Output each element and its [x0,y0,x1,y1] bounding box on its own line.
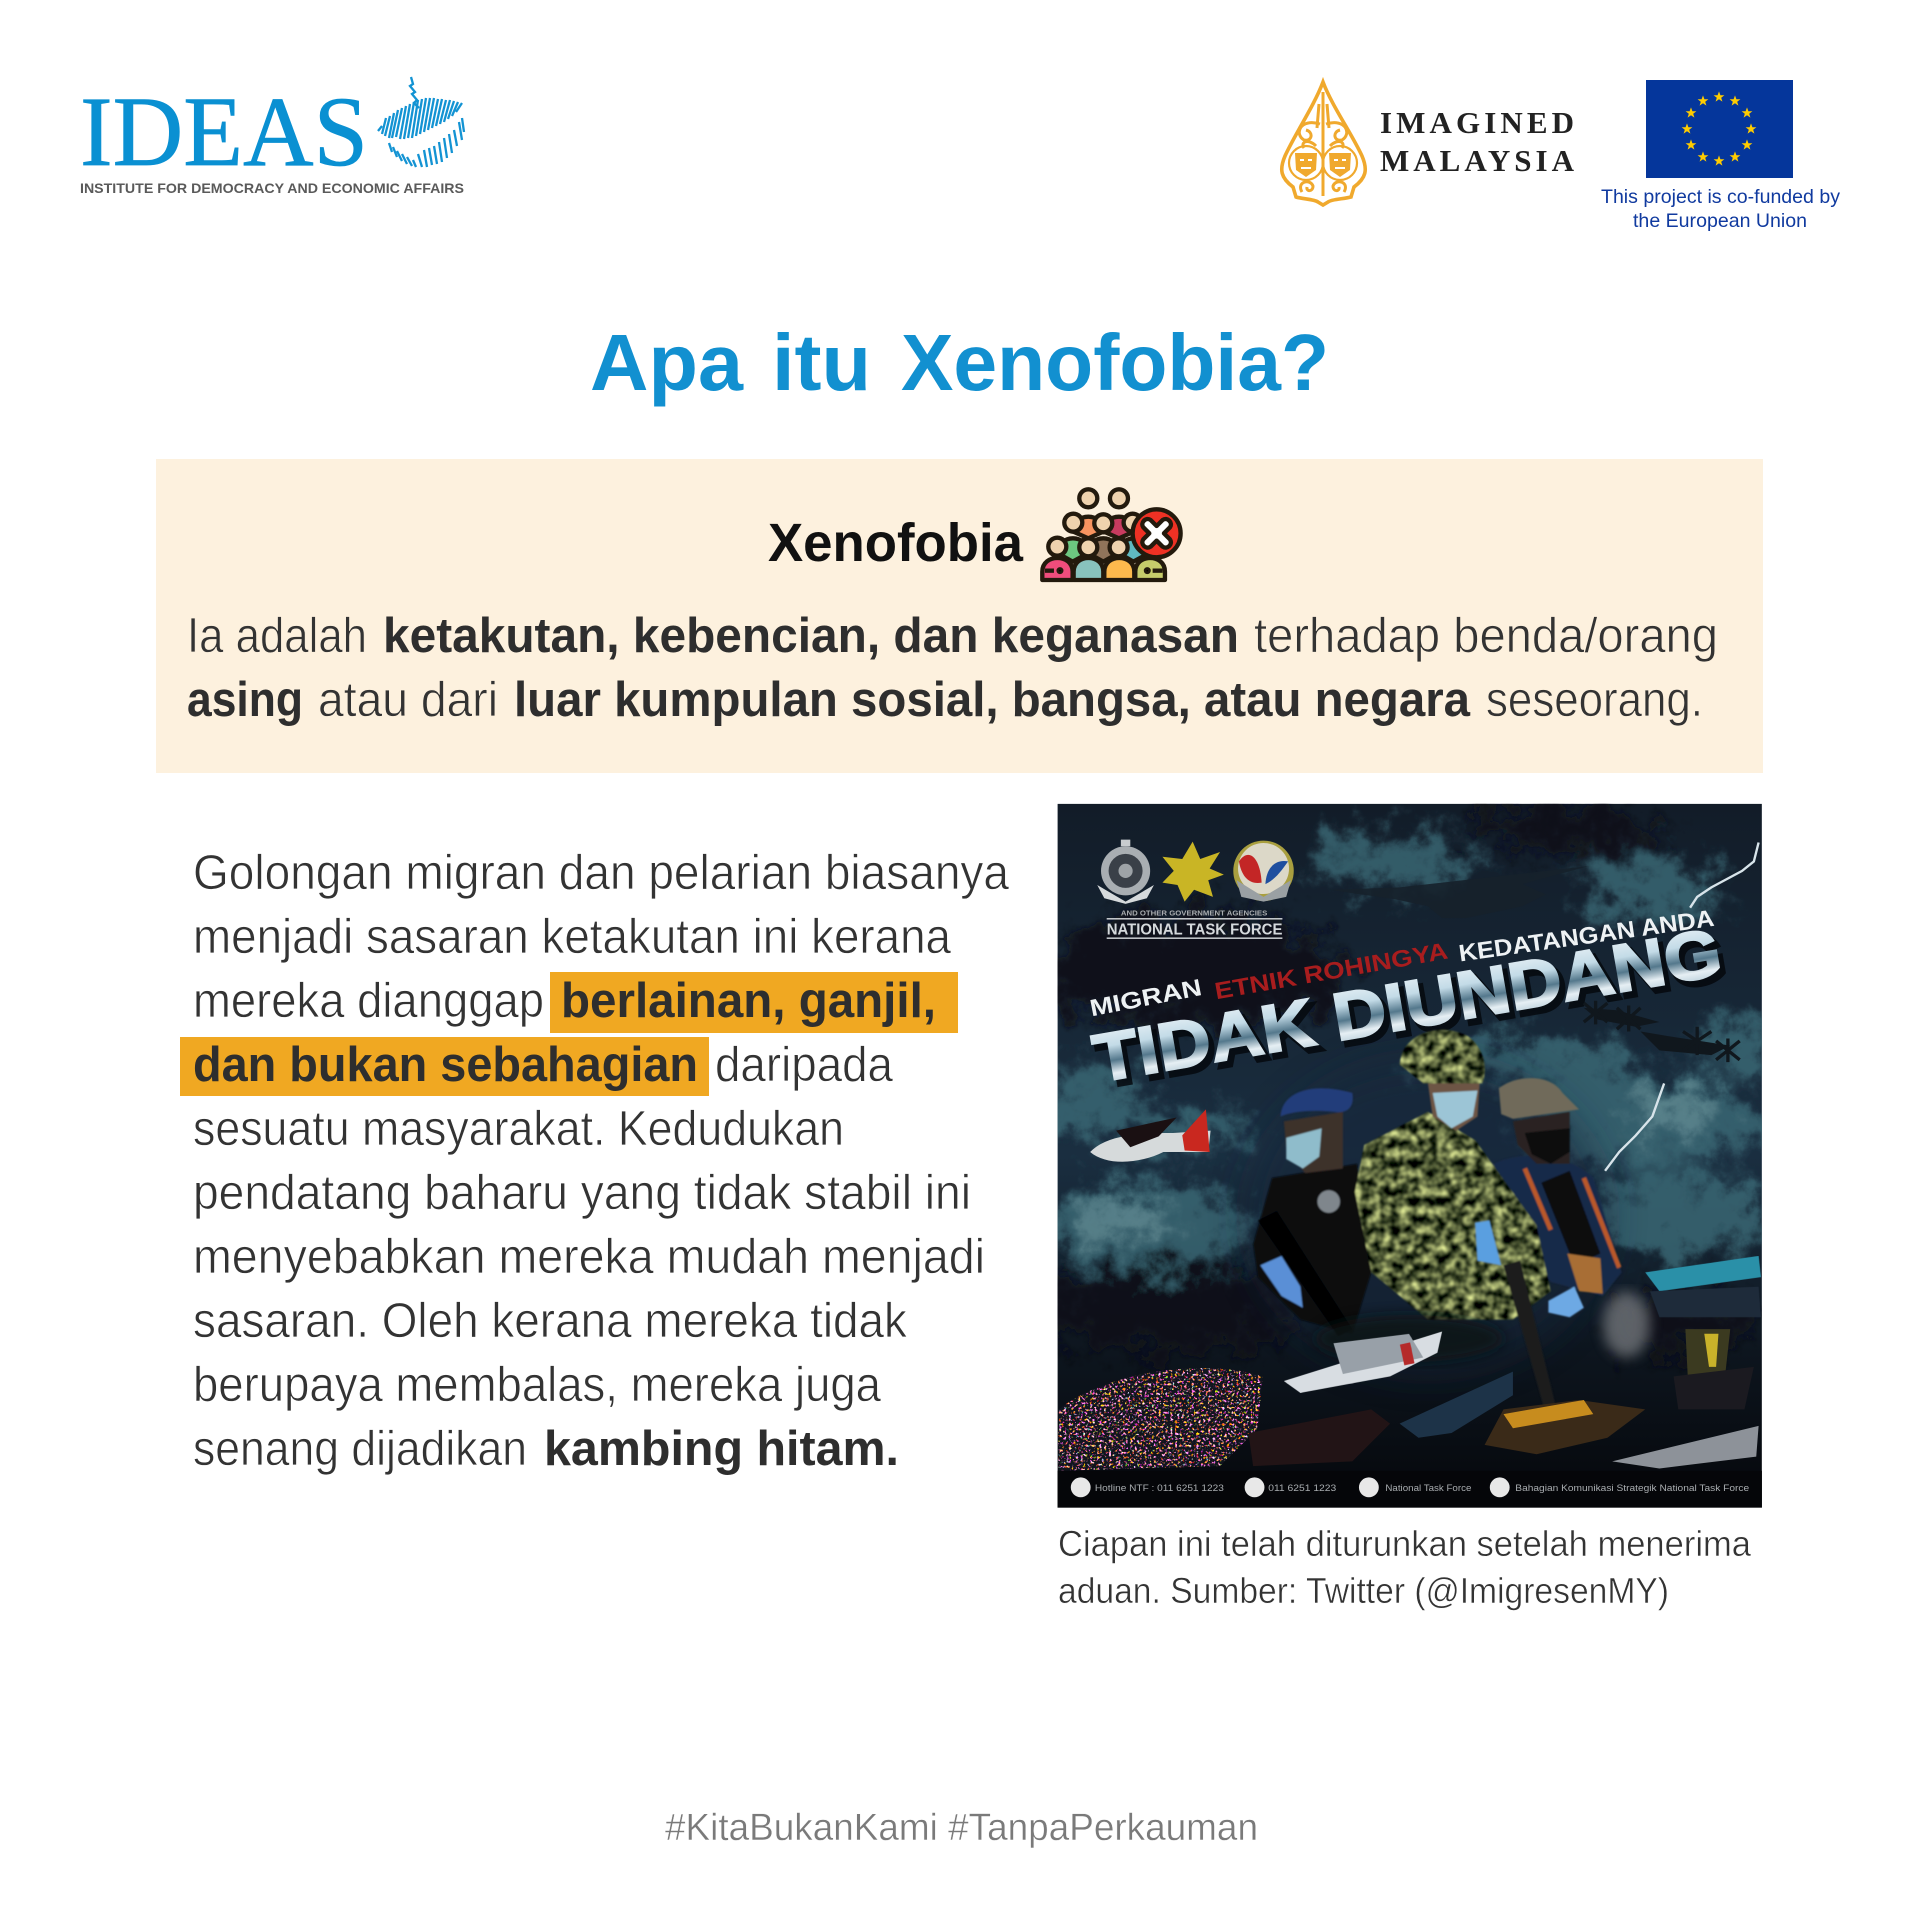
agency crests [1097,840,1294,904]
storm clouds [1031,805,1777,1353]
definition text: terhadap benda/orang [1254,609,1718,663]
paragraph text: sesuatu masyarakat. Kedudukan [193,1102,844,1156]
definition text: atau dari [318,673,498,727]
title: Apa [590,318,744,407]
image caption: aduan. Sumber: Twitter (@ImigresenMY) [1058,1570,1669,1611]
fishing boats [1248,1329,1759,1468]
paragraph text: dan bukan sebahagian [193,1038,698,1092]
definition text: Ia adalah [187,609,367,663]
highlight: line two [180,1037,709,1096]
task force label [1107,909,1283,939]
task force label: AND OTHER GOVERNMENT AGENCIES [1121,909,1268,917]
poster image: National Task Force [1031,804,1777,1508]
paragraph text: Golongan migran dan pelarian biasanya [193,846,1010,900]
headline small: KEDATANGAN ANDA [1457,906,1716,968]
tiger faces [1295,153,1351,177]
footer hashtags: #KitaBukanKami #TanpaPerkauman [665,1807,1258,1849]
paragraph text [193,846,1010,1476]
logo: Imagined Malaysia [1282,82,1575,205]
definition text: ketakutan, kebencian, dan keganasan [383,609,1239,663]
headline small [1088,906,1716,1022]
paragraph text: menjadi sasaran ketakutan ini kerana [193,910,952,964]
image caption: Ciapan ini telah diturunkan setelah menerima [1058,1523,1752,1564]
title: Xenofobia? [901,318,1329,407]
left officer [1253,1088,1371,1336]
paragraph text: pendatang baharu yang tidak stabil ini [193,1166,971,1220]
definition text [187,609,1718,727]
panel: definition [156,459,1763,773]
EU flag [1646,80,1793,178]
soldiers [1253,1030,1622,1407]
paragraph text: kambing hitam. [544,1422,899,1476]
title [590,318,1329,407]
credit text [1601,186,1840,232]
icon: crowd with cross [1042,489,1181,580]
contact labels [1096,1484,1749,1493]
contact labels: National Task Force [1385,1483,1471,1494]
IDEAS wordmark: IDEAS [80,76,368,187]
contact icons [1071,1477,1510,1497]
paragraph text: berupaya membalas, mereka juga [193,1358,882,1412]
headline small: ETNIK ROHINGYA [1213,939,1450,1005]
contact labels: Bahagian Komunikasi Strategik National Task Force [1515,1483,1749,1494]
paragraph text: menyebabkan mereka mudah menjadi [193,1230,985,1284]
crowd of migrants [1059,1368,1263,1471]
lightning bolt [1605,843,1759,1171]
definition text: luar kumpulan sosial, bangsa, atau negara [514,673,1471,727]
wordmark: IMAGINED [1380,105,1574,140]
contact labels: Hotline NTF : 011 6251 1223 [1095,1483,1224,1494]
title: itu [772,318,871,407]
paragraph text: mereka dianggap [193,974,544,1028]
logo subtitle: INSTITUTE FOR DEMOCRACY AND ECONOMIC AFFAIRS [80,181,464,196]
logo: IDEAS [80,76,464,196]
headline large: TIDAK DIUNDANG [1093,920,1732,1102]
paragraph text: senang dijadikan [193,1422,527,1476]
crest: armed forces [1162,842,1224,902]
contact bar [1058,1471,1762,1508]
wordmark [1380,105,1575,178]
center soldier [1355,1030,1584,1407]
paragraph text: berlainan, ganjil, [561,974,936,1028]
right soldier [1494,1078,1622,1296]
image caption [1058,1523,1752,1611]
credit text: the European Union [1633,210,1807,232]
coast guard plane [1090,1109,1211,1162]
definition text: asing [187,673,303,727]
dark glow behind soldiers [1248,1060,1607,1372]
icon: gunungan leaf [1282,82,1365,205]
task force label: NATIONAL TASK FORCE [1107,921,1283,939]
fog and debris [1315,1291,1650,1362]
crest: police [1097,840,1154,904]
teal boat [1645,1256,1761,1291]
paragraph text: daripada [715,1038,894,1092]
headline small: MIGRAN [1088,975,1204,1022]
highlight: line one [550,972,958,1033]
helicopters [1584,1001,1740,1062]
credit text: This project is co-funded by [1601,186,1840,208]
contact labels: 011 6251 1223 [1268,1483,1336,1494]
icon: scribbled bird [378,77,464,167]
headline large: TIDAK DIUNDANG [1088,915,1727,1097]
paragraph text: sasaran. Oleh kerana mereka tidak [193,1294,907,1348]
crest: maritime [1233,841,1294,902]
patrol boat [1284,1331,1442,1393]
definition text: seseorang. [1486,673,1703,727]
transport plane silhouette [1350,866,1588,903]
body paragraph [180,846,1010,1476]
wordmark: MALAYSIA [1380,143,1575,178]
panel heading: Xenofobia [768,513,1024,573]
logo: European Union flag and credit [1601,80,1840,232]
